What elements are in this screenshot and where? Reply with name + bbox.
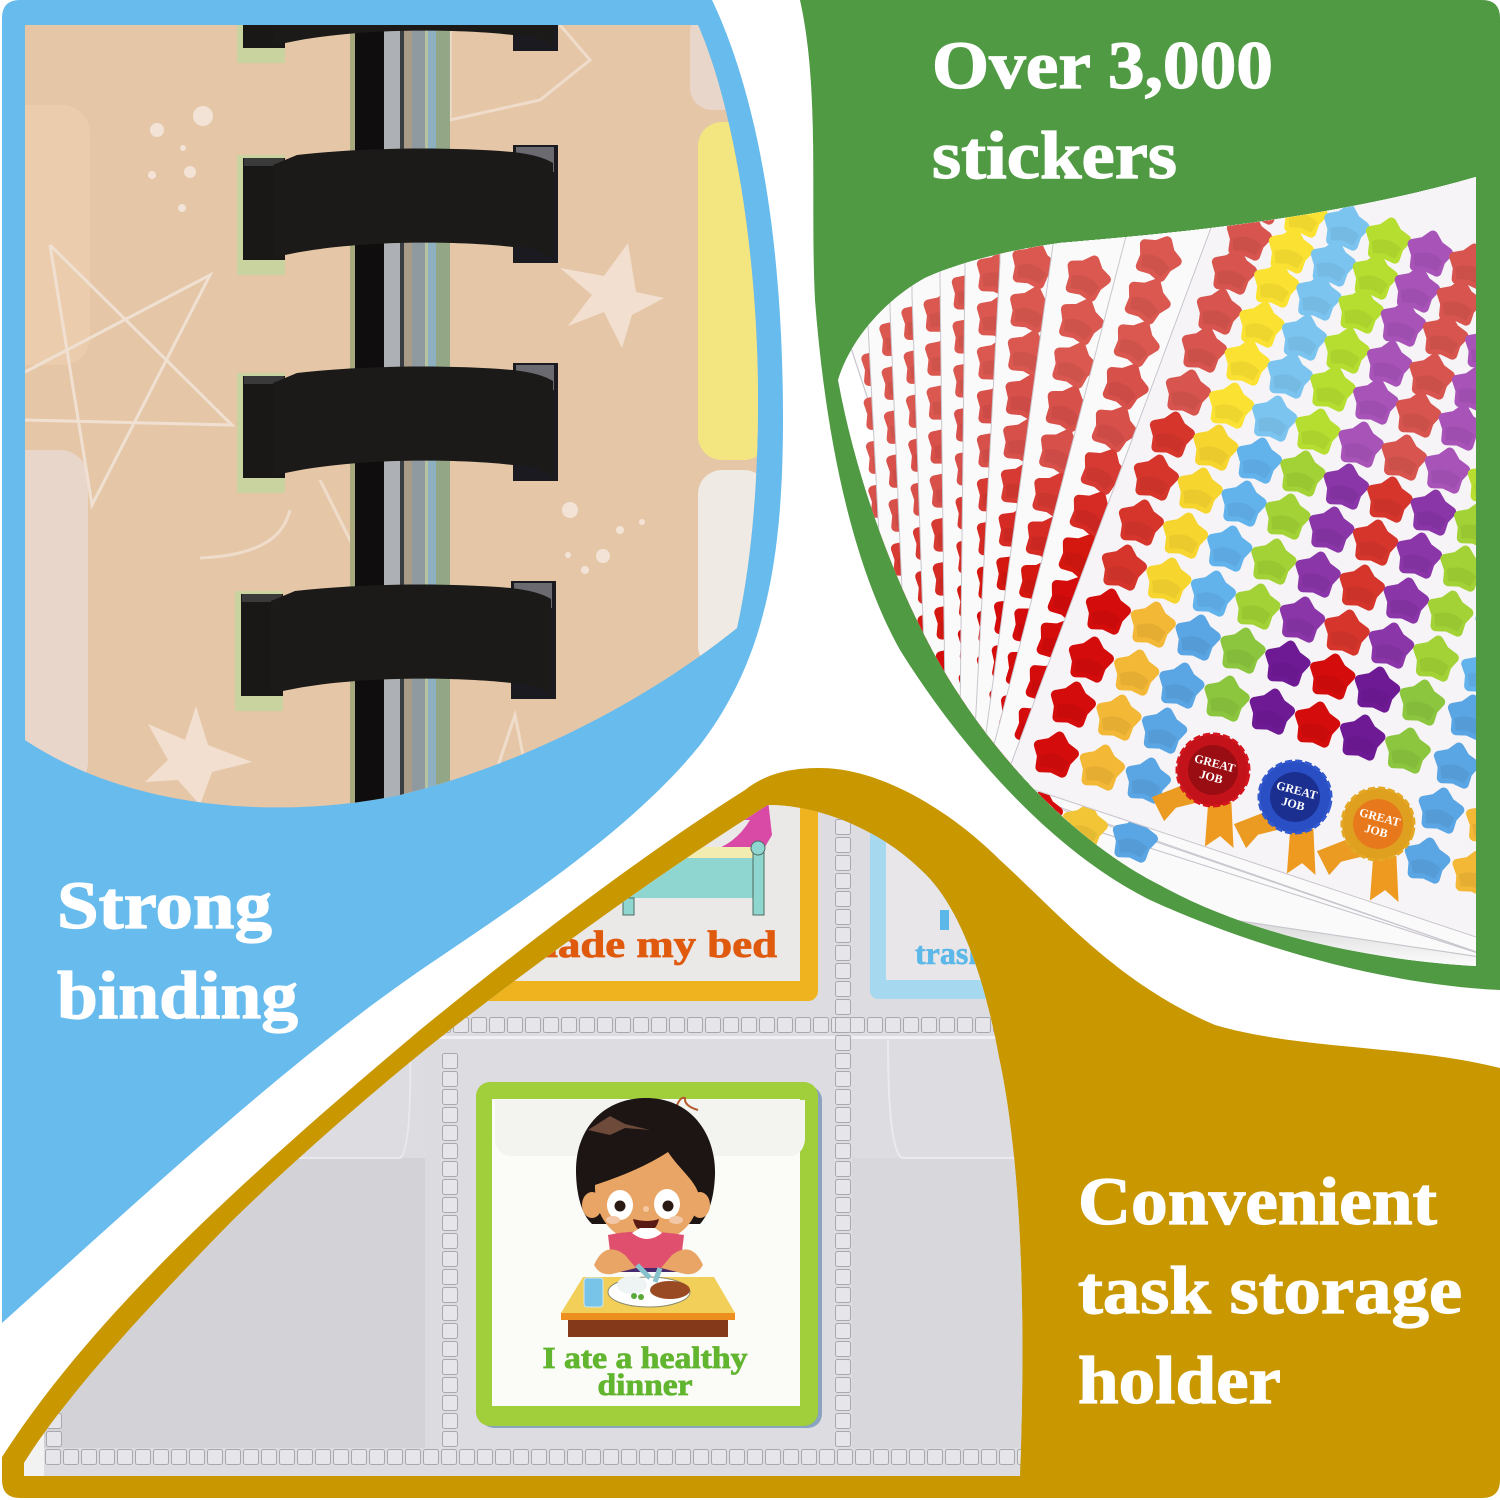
pocket seams [446,1017,994,1033]
blue panel shape [2,0,783,1323]
front sticker sheet [1010,228,1476,938]
heading: convenient task storage holder: holder [1078,1342,1281,1418]
task card: trash [870,832,986,999]
heading: convenient task storage holder: Convenient [1078,1163,1437,1239]
star columns [1034,179,1500,893]
green panel shape [800,0,1500,990]
task card: trash: trash [915,935,986,971]
shadow under sheets [1216,912,1476,966]
badge: blue great job: GREAT [1275,778,1319,802]
badge: orange great job: GREAT [1358,805,1402,829]
heading: strong binding: Strong [57,867,272,943]
badge: blue great job [1234,760,1332,875]
heading: convenient task storage holder: task storage [1078,1252,1462,1328]
heading: over 3,000 stickers: stickers [932,117,1177,193]
photo: spiral binding [0,0,768,815]
badge: orange great job: JOB [1363,821,1389,841]
badge: red great job: GREAT [1193,751,1237,775]
task card: made my bed: I made my bed [492,924,777,966]
right pocket [1014,1158,1022,1448]
heading: over 3,000 stickers: Over 3,000 [932,27,1273,103]
badge: red great job: JOB [1198,767,1224,787]
peeking second row [1018,790,1156,859]
panel: task storage holder [2,768,1500,1498]
icon: child eating dinner [561,1098,735,1337]
card caption: dinner [598,1367,693,1402]
badge: orange great job [1317,786,1416,902]
left pocket [44,1158,440,1448]
card caption: I ate a healthy [542,1340,748,1375]
photo: clear card pockets [20,780,1046,1480]
panel: over 3,000 stickers [800,0,1500,990]
gold panel shape [2,768,1500,1498]
spine [350,25,450,805]
panel: strong binding [0,0,783,1323]
heading: strong binding: binding [57,957,298,1033]
badge: blue great job: JOB [1280,794,1306,814]
photo: fanned star sticker sheets [838,177,1476,966]
task card: made my bed [488,805,818,1001]
badge: red great job [1152,732,1250,848]
task card: healthy dinner [476,1082,822,1428]
binding coils [235,0,558,711]
